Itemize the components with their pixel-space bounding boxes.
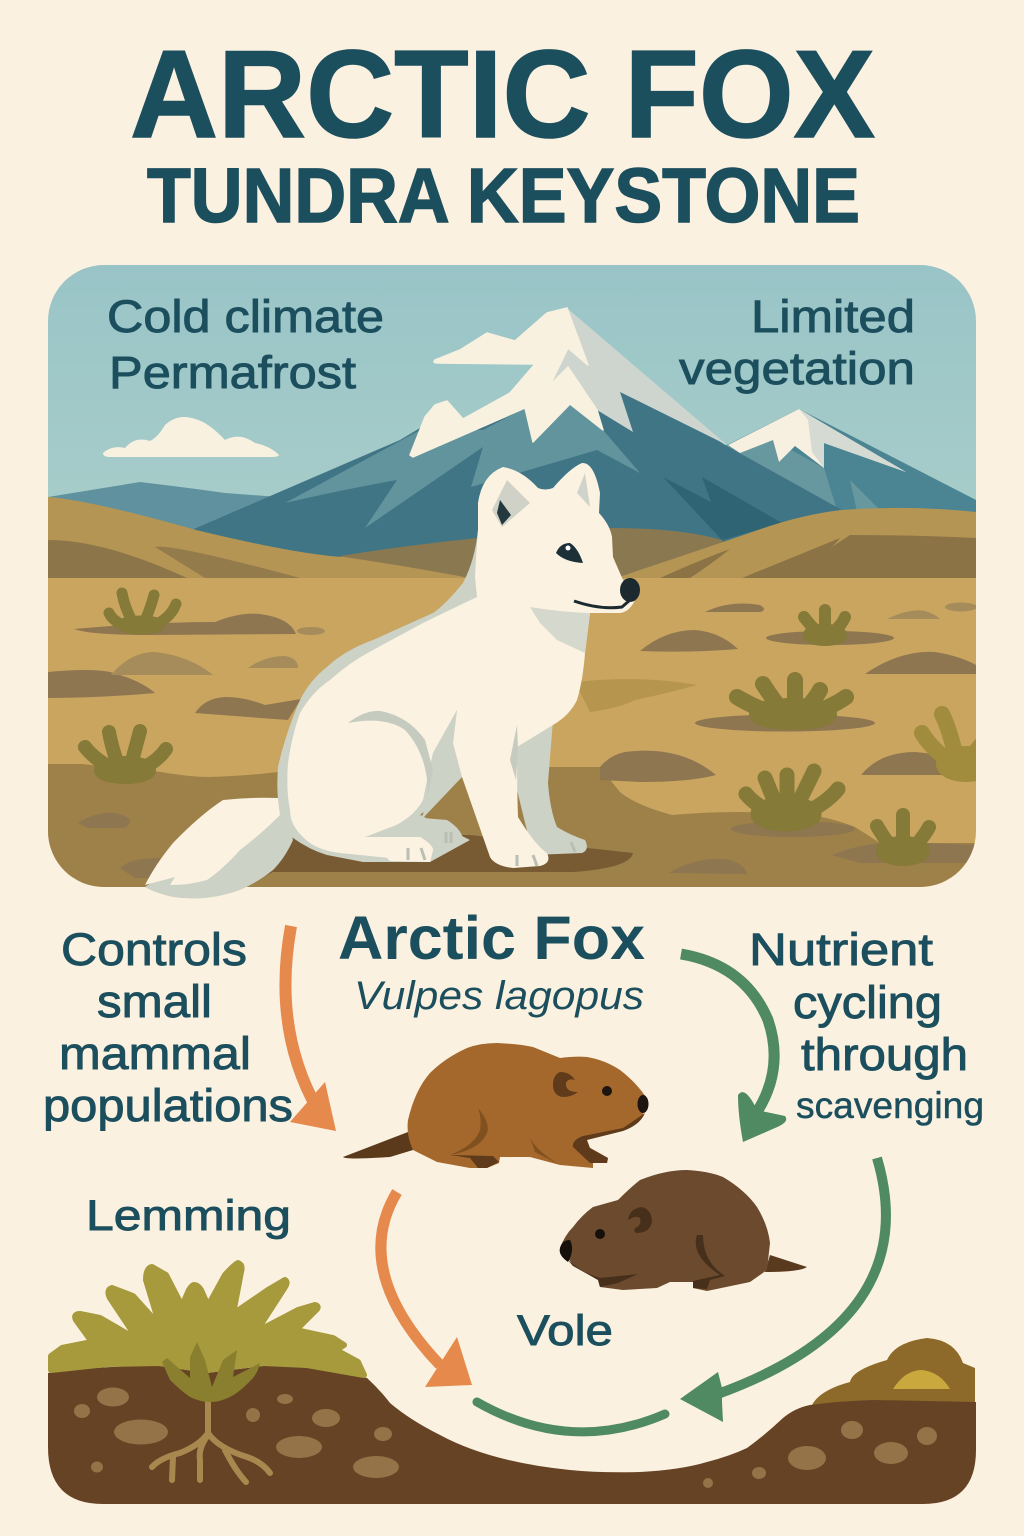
label: cold climate: Permafrost bbox=[109, 347, 357, 398]
label: limited vegetation: vegetation bbox=[679, 343, 915, 394]
mountain: right shading bbox=[725, 440, 878, 509]
text: nutrient cycling through scavenging: Nutrient bbox=[749, 924, 934, 975]
panel: tundra landscape bbox=[48, 265, 988, 898]
ear bbox=[553, 1072, 578, 1097]
distant hills bbox=[48, 482, 270, 530]
left ear inner bbox=[492, 480, 530, 527]
front foot dark bbox=[573, 1113, 645, 1163]
text: controls small mammal populations bbox=[43, 924, 293, 1131]
icon: plant with roots bbox=[51, 1263, 364, 1482]
icon: lemming bbox=[343, 1043, 648, 1168]
nose bbox=[638, 1095, 648, 1113]
text: nutrient cycling through scavenging bbox=[749, 924, 984, 1126]
hind near foot bbox=[365, 837, 433, 862]
soil bbox=[48, 1366, 976, 1504]
tail cream bbox=[145, 798, 280, 885]
label: cold climate: Cold climate bbox=[107, 291, 384, 342]
left ear dark bbox=[497, 500, 511, 525]
mountain: right snow shadow bbox=[799, 409, 906, 472]
label: vole: Vole bbox=[517, 1307, 613, 1355]
far hind foot bbox=[365, 818, 463, 849]
shrub: B bbox=[85, 731, 166, 777]
sky bbox=[48, 265, 976, 500]
right hill bbox=[622, 508, 976, 578]
tail bbox=[343, 1132, 413, 1158]
front leg inner shadow bbox=[510, 725, 518, 780]
right ear inner bbox=[577, 473, 590, 507]
body grey outline bbox=[277, 530, 490, 862]
text: controls small mammal populations: small bbox=[97, 976, 212, 1027]
text: nutrient cycling through scavenging: scavenging bbox=[796, 1085, 984, 1126]
foliage bbox=[51, 1263, 364, 1375]
mountain snow bbox=[410, 308, 603, 457]
icon: vole bbox=[560, 1170, 807, 1291]
text: controls small mammal populations: Controls bbox=[61, 924, 247, 975]
cloud: left bbox=[103, 417, 279, 457]
label: limited vegetation: Limited bbox=[751, 291, 915, 342]
arrow: green fox to nutrient bbox=[681, 954, 786, 1142]
ground bbox=[48, 578, 976, 888]
hind shadow bbox=[693, 1235, 725, 1289]
inner leaves bbox=[162, 1342, 260, 1402]
mouth shadow bbox=[566, 1258, 638, 1287]
label: limited vegetation bbox=[679, 291, 915, 394]
soil stones bbox=[74, 1388, 937, 1488]
mountain: main bbox=[194, 392, 842, 557]
heading: Arctic Fox: Arctic Fox bbox=[338, 904, 645, 972]
mouth bbox=[574, 600, 630, 608]
shrub: D bbox=[804, 610, 845, 640]
arc: soil cycle bbox=[477, 1402, 665, 1432]
ground mounds bbox=[48, 604, 976, 878]
title: TUNDRA KEYSTONE bbox=[147, 153, 860, 239]
text: nutrient cycling through scavenging: through bbox=[801, 1029, 968, 1080]
center hill bbox=[340, 528, 740, 580]
body bbox=[560, 1170, 770, 1291]
mountain: right bbox=[727, 409, 976, 512]
shrub: F bbox=[877, 815, 929, 859]
nose bbox=[560, 1240, 572, 1262]
shrub: E bbox=[746, 771, 838, 824]
title bbox=[130, 26, 875, 239]
haunch arc bbox=[348, 711, 433, 795]
haunch grey wedge bbox=[365, 710, 462, 837]
tail bbox=[765, 1255, 807, 1272]
text: nutrient cycling through scavenging: cycling bbox=[793, 977, 942, 1028]
nose bbox=[620, 578, 640, 602]
body cream bbox=[287, 463, 636, 868]
text: controls small mammal populations: populations bbox=[43, 1080, 293, 1131]
eye bbox=[595, 1229, 605, 1239]
label: lemming: Lemming bbox=[86, 1192, 291, 1240]
shrubs bbox=[85, 593, 988, 859]
arctic fox bbox=[145, 463, 640, 898]
text: controls small mammal populations: mammal bbox=[59, 1028, 251, 1079]
chest grey bbox=[530, 607, 590, 653]
light ground mounds bbox=[111, 602, 977, 675]
tail grey bbox=[145, 798, 293, 898]
mountain dark streaks bbox=[663, 477, 782, 540]
heading: Arctic Fox bbox=[338, 904, 645, 1018]
hill shading right bbox=[660, 535, 976, 580]
left hill bbox=[48, 497, 466, 578]
ground lower bbox=[48, 764, 976, 890]
eye bbox=[602, 1086, 612, 1096]
body bbox=[408, 1043, 648, 1168]
label: cold climate bbox=[107, 291, 384, 398]
toes bbox=[408, 832, 575, 866]
hill shading left bbox=[48, 540, 187, 578]
shrub: A bbox=[109, 593, 176, 629]
heading: Arctic Fox: Vulpes lagopus bbox=[354, 974, 644, 1018]
arrow: orange lemming to soil bbox=[381, 1192, 472, 1387]
ear bbox=[628, 1207, 652, 1233]
ground shadow bbox=[265, 835, 633, 876]
ground light patch bbox=[575, 679, 697, 712]
shrub: C bbox=[737, 680, 846, 722]
roots bbox=[152, 1402, 270, 1482]
burrow mound bbox=[812, 1338, 975, 1405]
eye bbox=[556, 543, 583, 563]
mountain: right snow bbox=[728, 409, 906, 472]
mountain snow shadow bbox=[550, 308, 727, 445]
arrow: green vole to soil bbox=[680, 1158, 886, 1422]
haunch line bbox=[450, 1108, 488, 1155]
title: ARCTIC FOX bbox=[130, 26, 875, 164]
rear foot bbox=[450, 1155, 499, 1168]
mountain shading bbox=[285, 404, 640, 528]
chest line bbox=[530, 1137, 560, 1165]
far front leg bbox=[508, 720, 587, 855]
arrow: orange fox to lemming bbox=[285, 926, 336, 1131]
shrub: G bbox=[922, 714, 988, 774]
